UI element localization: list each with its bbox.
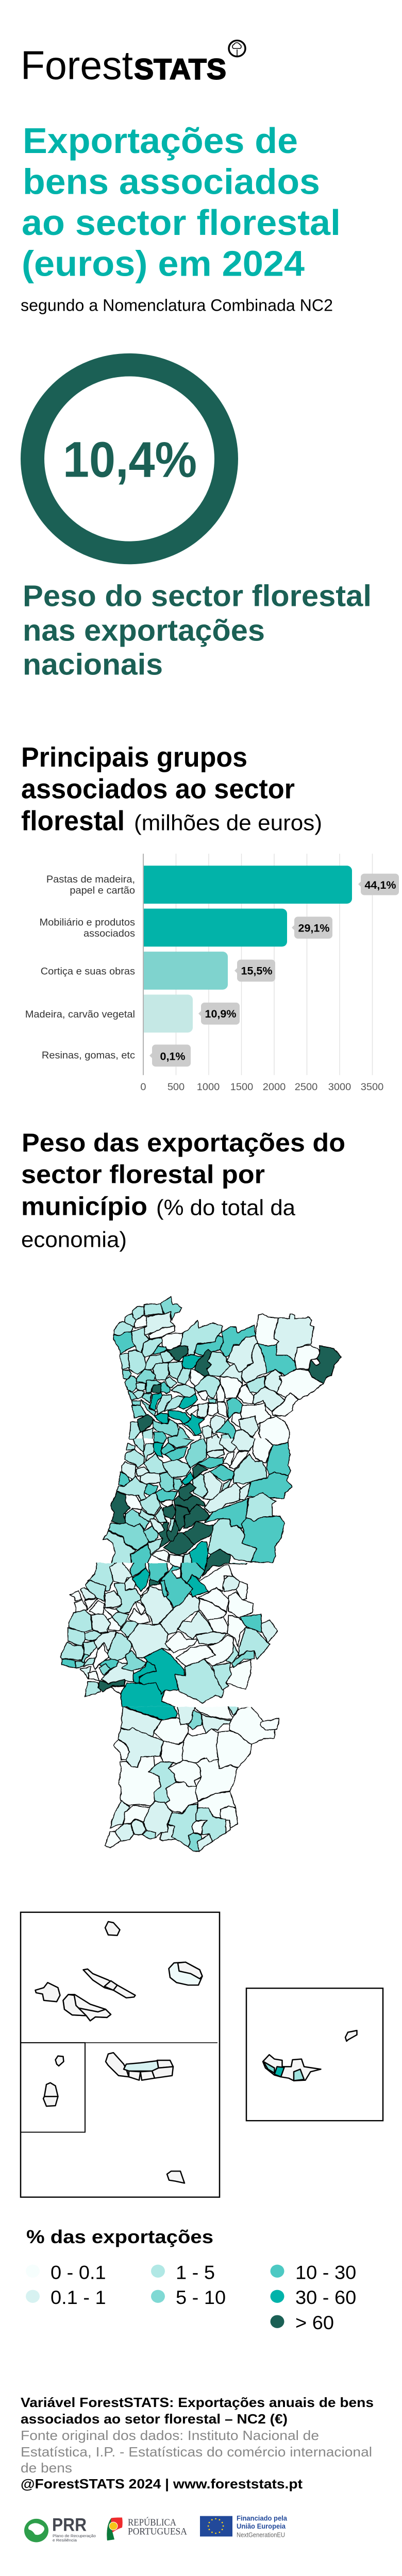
bar chart: Resinas, gomas, etc — [42, 1050, 135, 1061]
logo: PRR — [24, 2515, 96, 2543]
bar chart: 500 — [167, 1081, 185, 1093]
bar chart: papel e cartão — [70, 885, 135, 896]
bar chart: associados — [83, 928, 135, 939]
logo: EU NextGenerationEU: Financiado pela — [237, 2514, 287, 2522]
legend: 1 - 5 — [176, 2262, 215, 2283]
heading: peso por município: município — [21, 1192, 147, 1221]
ring stat: 10,4% — [32, 365, 226, 553]
bar chart: 1500 — [230, 1081, 253, 1093]
logo: República Portuguesa — [107, 2517, 188, 2540]
logo: EU NextGenerationEU: NextGenerationEU — [237, 2531, 285, 2538]
logo: PRR: Plano de Recuperação — [53, 2533, 96, 2538]
heading: peso do sector: Peso do sector florestal — [23, 579, 372, 613]
heading: peso por município — [21, 1128, 345, 1252]
legend: 5 - 10 — [176, 2287, 226, 2308]
subtitle: segundo a Nomenclatura Combinada NC2 — [21, 296, 333, 314]
legend — [26, 2226, 356, 2333]
bar chart: Cortiça e suas obras — [41, 966, 135, 977]
heading: peso por município: (% do total da — [156, 1196, 296, 1220]
ring stat: 10,4%: 10,4% — [63, 432, 197, 487]
bar chart: 29,1% — [298, 923, 330, 934]
map: Azores islands — [35, 1922, 202, 2106]
legend: > 60 — [295, 2312, 334, 2333]
title: bens associados — [23, 162, 320, 202]
inset: Madeira — [246, 1988, 383, 2121]
footer text: Estatística, I.P. - Estatísticas do comércio internacional — [21, 2445, 372, 2460]
heading: peso do sector — [23, 579, 372, 681]
footer text: Variável ForestSTATS: Exportações anuais de bens — [21, 2395, 374, 2410]
title: (euros) em 2024 — [22, 244, 305, 284]
bar chart: Mobiliário e produtos — [39, 917, 135, 928]
heading: peso por município: Peso das exportações do — [22, 1128, 345, 1157]
logo: PRR: PRR — [52, 2515, 87, 2535]
heading: peso por município: economia) — [21, 1228, 127, 1252]
footer text: associados ao setor florestal – NC2 (€) — [21, 2411, 288, 2427]
heading: principais grupos: (milhões de euros) — [134, 811, 322, 835]
bar chart: 1000 — [197, 1081, 220, 1093]
legend: 0 - 0.1 — [51, 2262, 106, 2283]
logo: ForestSTATS: Forest — [21, 43, 133, 88]
bar chart: 3000 — [328, 1081, 351, 1093]
heading: principais grupos: associados ao sector — [21, 774, 295, 804]
heading: principais grupos: florestal — [21, 806, 125, 836]
choropleth map: mainland Portugal municipalities — [60, 1297, 342, 1852]
bar chart: 2000 — [263, 1081, 286, 1093]
bar chart: Madeira, carvão vegetal — [25, 1009, 135, 1020]
logo: República Portuguesa: REPÚBLICA — [128, 2517, 177, 2528]
bar chart: 15,5% — [241, 965, 273, 977]
footer text: Fonte original dos dados: Instituto Nacional de — [21, 2428, 319, 2443]
logo: ForestSTATS — [21, 41, 245, 88]
bar chart: 2500 — [295, 1081, 317, 1093]
title — [22, 121, 341, 284]
legend: 10 - 30 — [295, 2262, 356, 2283]
bar chart — [25, 854, 399, 1093]
heading: peso do sector: nacionais — [23, 647, 163, 681]
logo: ForestSTATS: STATS — [134, 53, 226, 86]
bar chart: 44,1% — [365, 879, 396, 891]
bar chart: 3500 — [361, 1081, 383, 1093]
title: ao sector florestal — [22, 203, 341, 243]
bar chart: 10,9% — [205, 1008, 237, 1020]
heading: principais grupos — [21, 742, 322, 836]
logo: EU NextGenerationEU: União Europeia — [237, 2522, 286, 2530]
legend: 0.1 - 1 — [51, 2287, 106, 2308]
title: Exportações de — [23, 121, 298, 161]
legend: 30 - 60 — [295, 2287, 356, 2308]
footer text: @ForestSTATS 2024 | www.foreststats.pt — [21, 2477, 303, 2492]
bar chart: 0,1% — [160, 1051, 186, 1063]
bar chart: 0 — [140, 1081, 146, 1093]
logo: EU NextGenerationEU — [200, 2514, 287, 2538]
logo: PRR: e Resiliência — [53, 2538, 77, 2543]
heading: principais grupos: Principais grupos — [21, 742, 247, 773]
bar chart: Pastas de madeira, — [46, 874, 135, 885]
heading: peso do sector: nas exportações — [23, 614, 265, 647]
footer text: de bens — [21, 2461, 72, 2476]
logo: República Portuguesa: PORTUGUESA — [128, 2526, 188, 2537]
heading: peso por município: sector florestal por — [21, 1160, 265, 1189]
map: Santa Maria island — [167, 2171, 185, 2183]
legend: % das exportações — [26, 2226, 213, 2247]
inset frame: Azores — [21, 1912, 220, 2197]
footer text — [21, 2395, 374, 2492]
